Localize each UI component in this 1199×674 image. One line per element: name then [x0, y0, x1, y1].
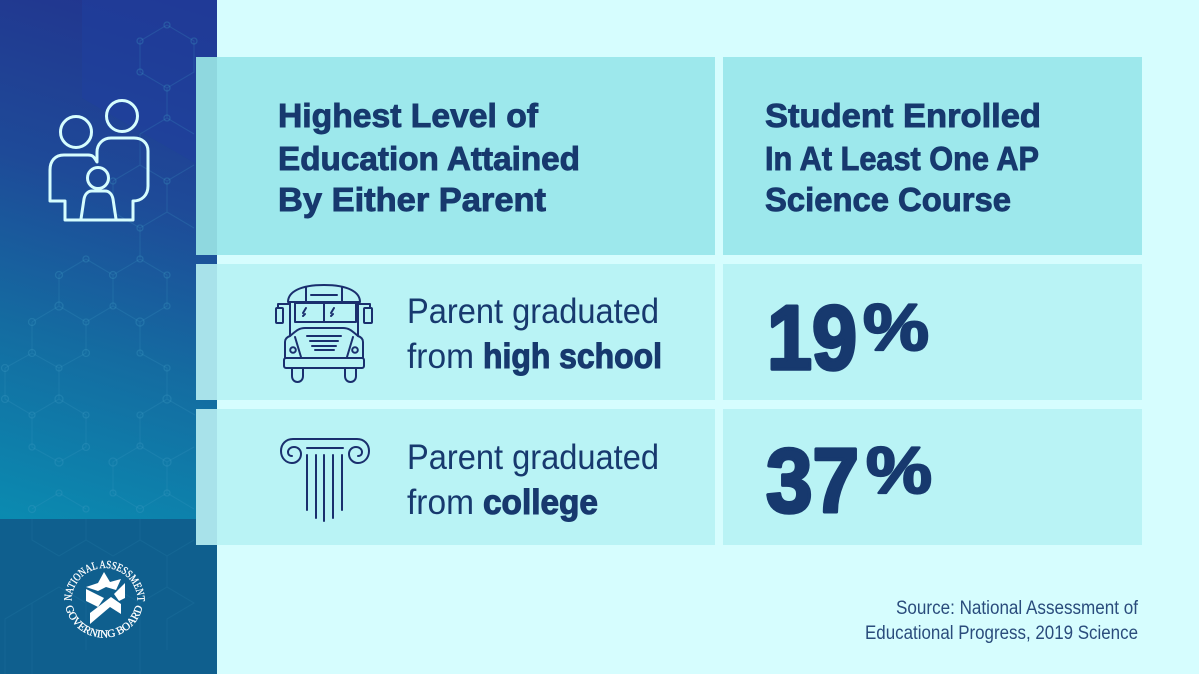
panel: high school row — [196, 264, 715, 400]
stat: 37% — [766, 431, 932, 532]
source note: Source: National Assessment of — [896, 598, 1139, 619]
text: parent graduated from high school: from — [407, 337, 474, 376]
heading: student enrolled: In At Least One AP — [765, 140, 1039, 177]
logo: National Assessment Governing Board — [64, 560, 145, 638]
stat: 19%: 19 — [767, 288, 857, 389]
panel: header left — [196, 57, 715, 255]
text: parent graduated from high school: high school — [483, 337, 662, 376]
icon: school bus — [276, 285, 372, 382]
stat: 19%: % — [863, 290, 929, 364]
text: parent graduated from high school: Parent graduated — [407, 292, 659, 331]
text: parent graduated from college — [407, 438, 659, 522]
stat: 19% — [767, 288, 929, 389]
icon: family — [50, 100, 148, 220]
logo: National Assessment Governing Board: NATIONAL ASSESSMENT — [64, 560, 145, 602]
stat: 37%: 37 — [766, 431, 859, 532]
panel: college row — [196, 409, 715, 545]
heading: highest level of education: By Either Parent — [278, 181, 546, 218]
heading: student enrolled: Science Course — [765, 181, 1011, 218]
panel: header right — [723, 57, 1142, 255]
text: parent graduated from college: Parent graduated — [407, 438, 659, 477]
heading: highest level of education: Education Attained — [278, 140, 580, 177]
heading: highest level of education — [278, 97, 580, 218]
panel: 19 percent — [723, 264, 1142, 400]
icon: column — [281, 439, 369, 521]
panel: 37 percent — [723, 409, 1142, 545]
text: parent graduated from high school — [407, 292, 662, 376]
heading: highest level of education: Highest Level of — [278, 97, 539, 134]
heading: student enrolled: Student Enrolled — [765, 97, 1041, 134]
stat: 37%: % — [866, 433, 932, 507]
text: parent graduated from college: college — [483, 483, 598, 522]
source note — [865, 598, 1139, 644]
heading: student enrolled — [765, 97, 1041, 218]
source note: Educational Progress, 2019 Science — [865, 623, 1138, 644]
text: parent graduated from college: from — [407, 483, 474, 522]
panel: sidebar — [0, 0, 217, 674]
logo: National Assessment Governing Board: GOVERNING BOARD — [66, 606, 142, 638]
